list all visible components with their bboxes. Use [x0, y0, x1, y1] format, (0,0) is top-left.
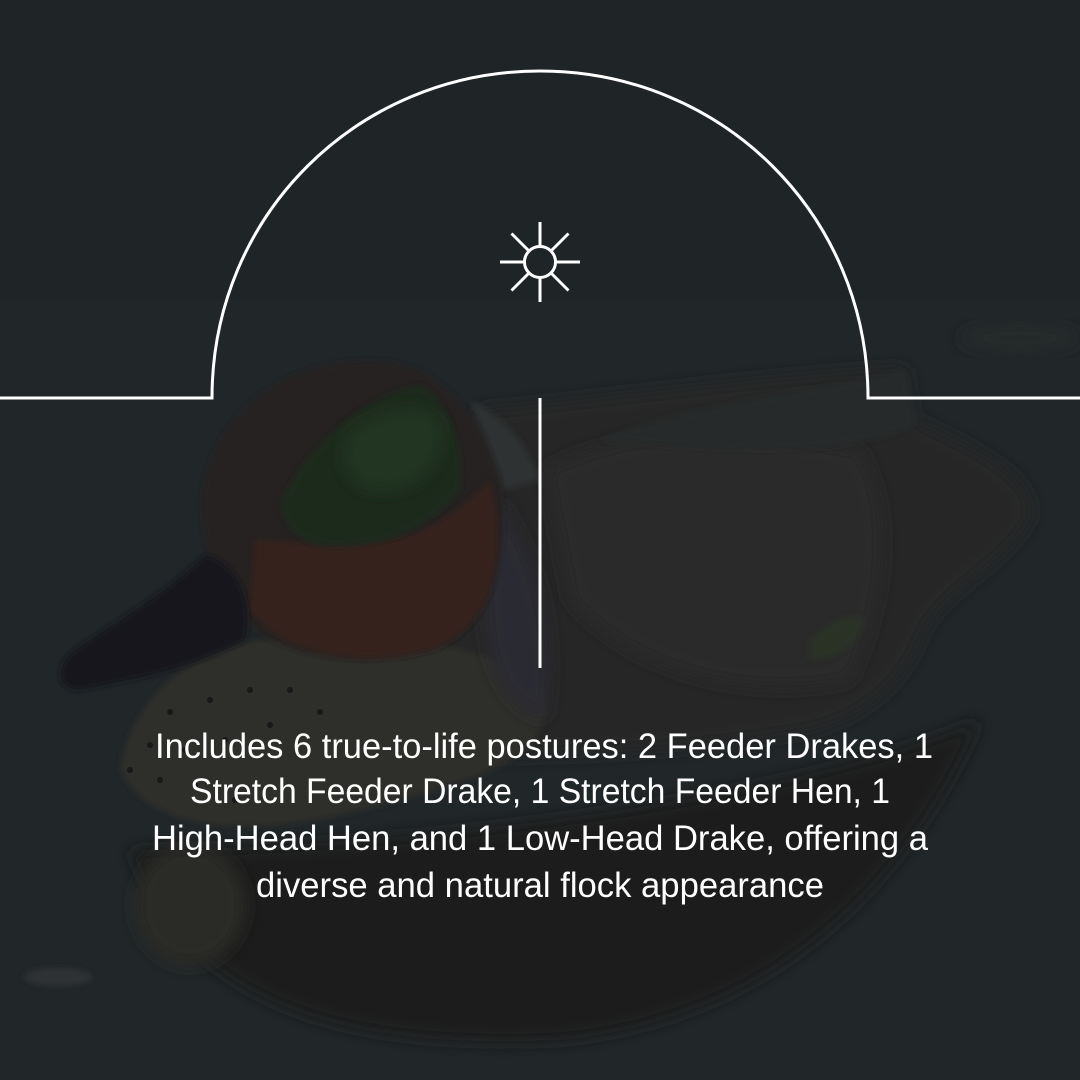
vertical divider line: [538, 398, 542, 668]
reflection: [130, 720, 980, 1041]
arch divider line: [0, 71, 1080, 398]
breast: [120, 636, 545, 826]
text block: postures description: Stretch Feeder Drake, 1 Stretch Feeder Hen, 1: [190, 772, 890, 811]
breast speckles: [127, 687, 323, 803]
bill: [61, 555, 248, 690]
body: [240, 368, 1031, 756]
cheek: [250, 480, 498, 658]
text block: postures description: [152, 727, 933, 905]
green eye patch: [282, 385, 461, 546]
icon: sun: [500, 222, 580, 302]
text block: postures description: High-Head Hen, and 1 Low-Head Drake, offering a: [152, 819, 929, 858]
text block: postures description: Includes 6 true-to-life postures: 2 Feeder Drakes, 1: [155, 727, 933, 766]
text block: postures description: diverse and natural flock appearance: [256, 866, 824, 905]
head: [202, 361, 502, 658]
